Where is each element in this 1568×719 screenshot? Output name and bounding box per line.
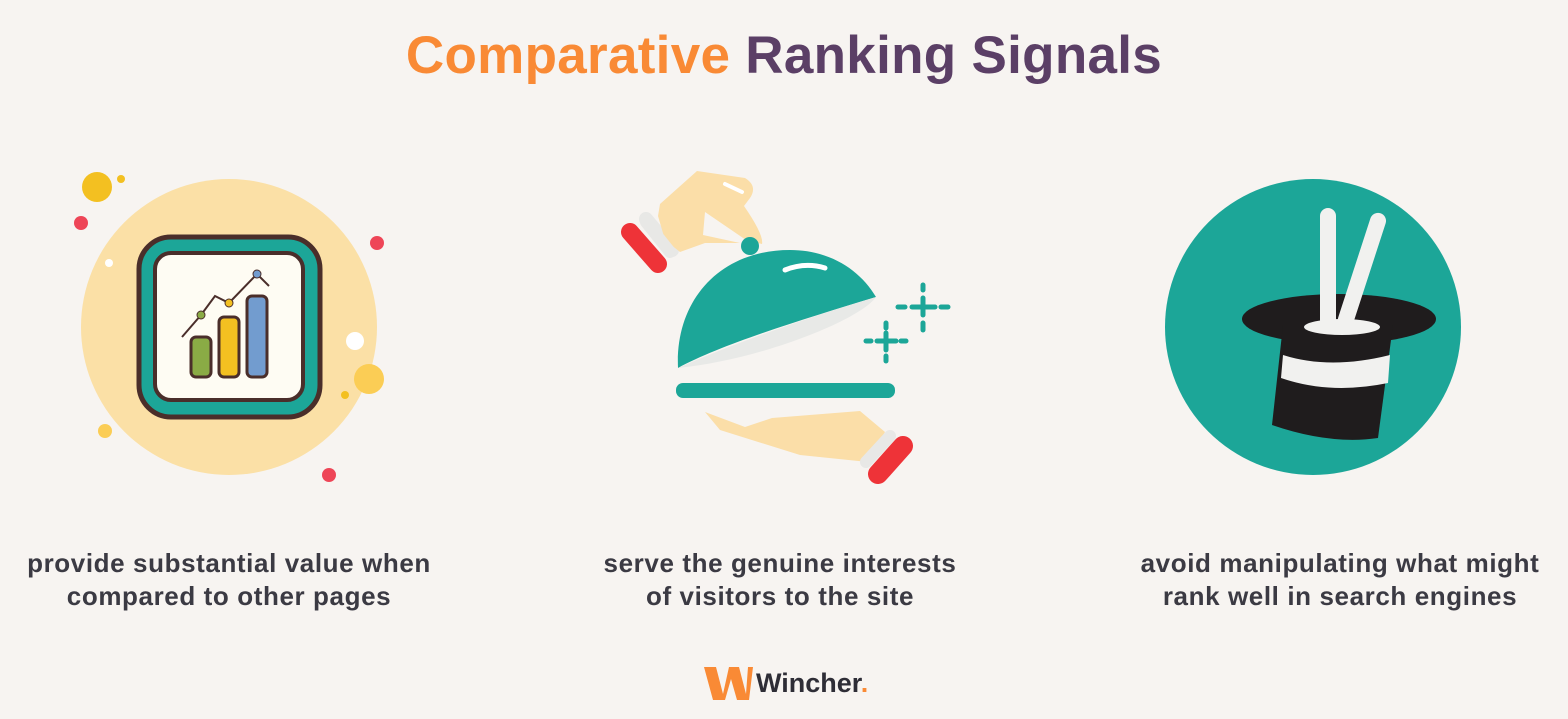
logo: Wincher. <box>756 668 868 698</box>
text: col 3 <box>1141 548 1539 611</box>
text: col 1: provide substantial value when <box>27 548 431 578</box>
text: col 1 <box>27 548 431 611</box>
text: col 3: avoid manipulating what might <box>1141 548 1539 578</box>
icon: magic hat <box>1165 179 1461 475</box>
text: col 2: of visitors to the site <box>646 581 914 611</box>
text: col 1: compared to other pages <box>67 581 391 611</box>
text: col 2: serve the genuine interests <box>604 548 956 578</box>
text: col 2 <box>604 548 956 611</box>
icon: chart <box>74 172 384 482</box>
text: col 3: rank well in search engines <box>1163 581 1517 611</box>
title: Comparative Ranking Signals <box>406 26 1162 85</box>
logo <box>704 667 868 700</box>
icon: cloche <box>630 171 948 474</box>
